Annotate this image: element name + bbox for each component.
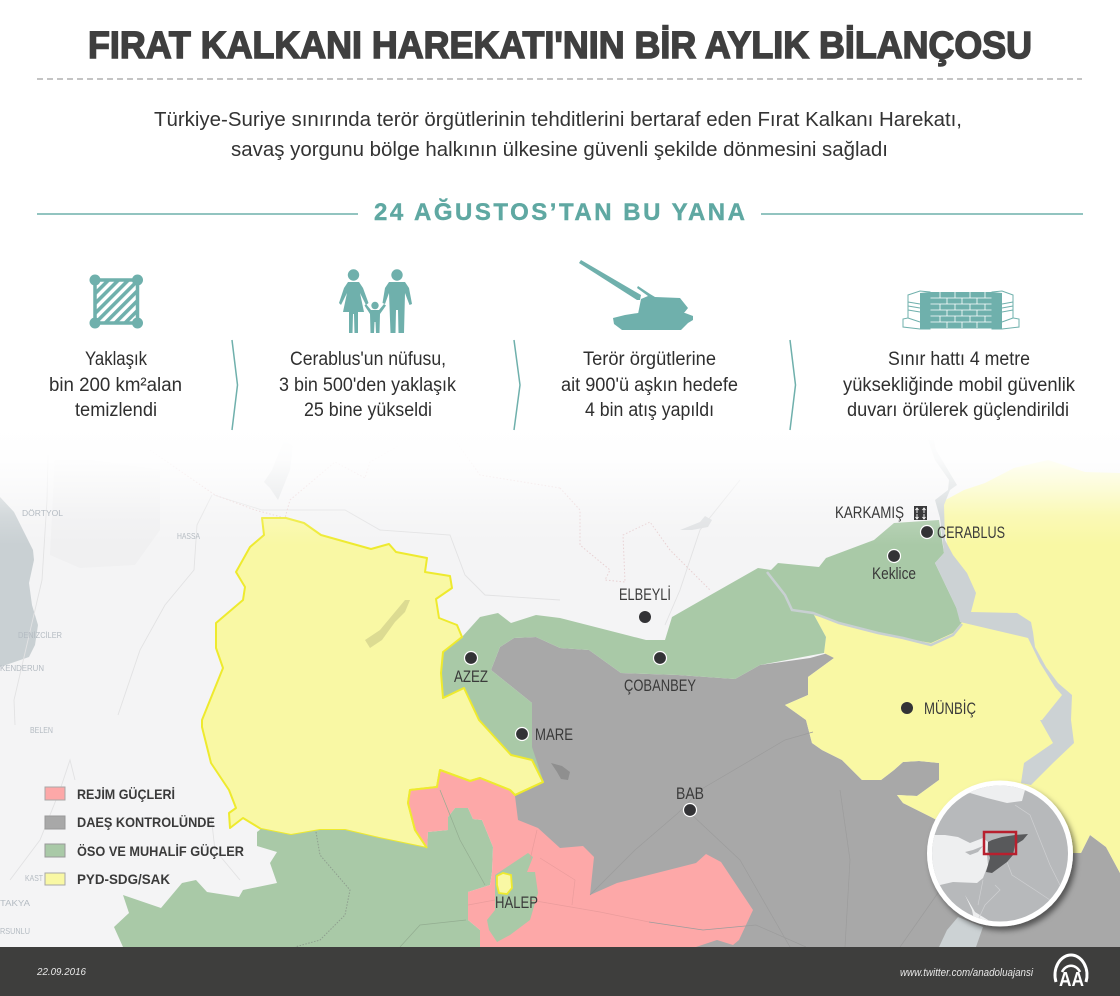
map: lake above bbox=[264, 440, 293, 500]
city labels: HALEP bbox=[495, 894, 538, 912]
arrow: chevron 1 bbox=[232, 340, 238, 430]
text: Cerablus population: 3 bin 500'den yaklaşık bbox=[279, 375, 456, 396]
column 4 bbox=[843, 291, 1075, 421]
map: Halep green enclave bbox=[487, 853, 538, 942]
legend: PYD-SDG/SAK bbox=[77, 871, 170, 887]
map: Halep yellow enclave bbox=[497, 873, 512, 894]
faint place names bbox=[0, 508, 200, 936]
map: lake in gray zone bbox=[551, 763, 570, 780]
city labels bbox=[454, 504, 1005, 912]
legend: REJİM GÜÇLERİ bbox=[77, 786, 175, 802]
city labels: Keklice bbox=[872, 565, 916, 583]
icon: howitzer bbox=[579, 260, 693, 330]
faint place names: KENDERUN bbox=[0, 663, 44, 673]
icon: family bbox=[339, 269, 412, 333]
icon: wall bbox=[903, 291, 1019, 329]
text: area cleared: Yaklaşık bbox=[85, 349, 147, 370]
column 1 bbox=[49, 274, 182, 421]
column 3 bbox=[561, 260, 738, 421]
map: dotted borders bbox=[150, 440, 710, 590]
city labels: ELBEYLİ bbox=[619, 585, 671, 604]
faint place names: RSUNLU bbox=[0, 926, 30, 936]
arrow: chevron 3 bbox=[790, 340, 796, 430]
text: border wall bbox=[843, 349, 1075, 421]
faint place names: KAST bbox=[25, 873, 43, 883]
map: river south bbox=[939, 917, 983, 947]
map: boundary on green bbox=[295, 832, 350, 947]
text: artillery: 4 bin atış yapıldı bbox=[585, 400, 714, 421]
intro text: Türkiye-Suriye sınırında terör örgütlerinin tehditlerini bertaraf eden Fırat Kalkanı Harekatı, bbox=[154, 109, 962, 131]
text: border wall: duvarı örülerek güçlendirildi bbox=[847, 400, 1069, 421]
intro text bbox=[154, 109, 962, 161]
text: border wall: Sınır hattı 4 metre bbox=[888, 349, 1030, 370]
map: yellow zone east bbox=[785, 460, 1120, 873]
city labels: KARKAMIŞ bbox=[835, 504, 904, 522]
map bbox=[0, 425, 1120, 950]
city labels: MARE bbox=[535, 726, 573, 744]
icon: border gate bbox=[914, 506, 927, 520]
text: Cerablus population: Cerablus'un nüfusu, bbox=[290, 349, 446, 370]
section heading: 24 AĞUSTOS’TAN BU YANA bbox=[374, 198, 745, 226]
AA logo: AA bbox=[1059, 969, 1084, 991]
map: faint terrain and roads bbox=[10, 455, 740, 880]
title: FIRAT KALKANI HAREKATI'NIN BİR AYLIK BİLANÇOSU bbox=[88, 25, 1032, 67]
map: river bbox=[928, 440, 1074, 785]
faint place names: TAKYA bbox=[0, 898, 30, 908]
footer bar: 22.09.2016 bbox=[36, 967, 86, 978]
text: area cleared bbox=[49, 349, 182, 421]
faint place names: HASSA bbox=[177, 531, 200, 541]
icon: area square bbox=[90, 274, 143, 328]
map: green zone south west bbox=[114, 808, 493, 947]
faint place names: DÖRTYOL bbox=[22, 508, 63, 518]
legend: DAEŞ KONTROLÜNDE bbox=[77, 814, 215, 830]
text: area cleared: bin 200 km²alan bbox=[49, 375, 182, 396]
text: artillery: Terör örgütlerine bbox=[583, 349, 716, 370]
intro text: savaş yorgunu bölge halkının ülkesine güvenli şekilde dönmesini sağladı bbox=[231, 139, 888, 161]
city labels: ÇOBANBEY bbox=[624, 677, 696, 695]
city labels: CERABLUS bbox=[937, 524, 1005, 542]
city dots bbox=[464, 526, 934, 816]
map: yellow zone west bbox=[202, 518, 543, 848]
text: area cleared: temizlendi bbox=[75, 400, 157, 421]
AA logo bbox=[1055, 955, 1087, 991]
map: green zone north bbox=[441, 520, 962, 780]
city labels: BAB bbox=[676, 785, 704, 803]
map: lake in yellow zone bbox=[365, 600, 410, 648]
footer bar bbox=[0, 947, 1120, 996]
locator inset map bbox=[920, 775, 1073, 926]
text: artillery bbox=[561, 349, 738, 421]
arrow: chevron 2 bbox=[514, 340, 520, 430]
faint place names: BELEN bbox=[30, 725, 53, 735]
city labels: AZEZ bbox=[454, 668, 488, 686]
text: border wall: yüksekliğinde mobil güvenlik bbox=[843, 375, 1075, 396]
map: mountain shading bbox=[50, 455, 160, 568]
text: Cerablus population bbox=[279, 349, 456, 421]
legend: ÖSO VE MUHALİF GÜÇLER bbox=[77, 843, 244, 859]
map: sea bbox=[0, 497, 38, 667]
map: top fade bbox=[0, 425, 1120, 545]
map: roads on zones bbox=[590, 732, 940, 947]
text: artillery: ait 900'ü aşkın hedefe bbox=[561, 375, 738, 396]
faint place names: DENİZCİLER bbox=[18, 630, 62, 640]
city labels: MÜNBİÇ bbox=[924, 699, 976, 718]
footer bar: www.twitter.com/anadoluajansi bbox=[900, 967, 1033, 979]
map: gray zone bbox=[491, 637, 1120, 947]
map: pink zone bbox=[408, 770, 753, 947]
text: Cerablus population: 25 bine yükseldi bbox=[304, 400, 432, 421]
column 2 bbox=[279, 269, 456, 421]
legend bbox=[45, 786, 244, 887]
